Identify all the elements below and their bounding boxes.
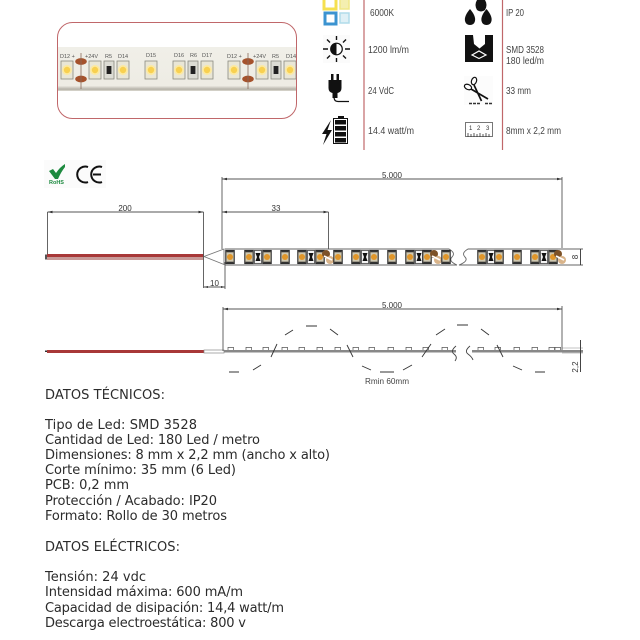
text block: technical data: Cantidad de Led: 180 Led / metro bbox=[45, 433, 260, 448]
spec: protection: IP 20 bbox=[506, 8, 524, 19]
heading: technical data: DATOS TÉCNICOS: bbox=[45, 387, 165, 403]
icon: power battery bbox=[322, 116, 348, 145]
icon: power plug bbox=[328, 74, 349, 102]
dimension: 2,2 bbox=[571, 340, 580, 373]
dimension: 5.000 side bbox=[223, 301, 562, 351]
text block: technical data: Dimensiones: 8 mm x 2,2 mm (ancho x alto) bbox=[45, 448, 330, 463]
icon: scissors bbox=[463, 76, 493, 105]
strip top view: right segment bbox=[459, 249, 583, 265]
dimension: 5.000 top: 5.000 bbox=[382, 171, 403, 180]
spec: dimensions: 8mm x 2,2 mm bbox=[506, 126, 561, 137]
strip photo band: D12 + bbox=[227, 54, 242, 60]
icon: ruler: 3 bbox=[486, 126, 490, 132]
strip photo band bbox=[58, 47, 296, 91]
strip photo band: +24V bbox=[253, 54, 266, 60]
dimension: 33 bbox=[222, 204, 328, 249]
dimension: 5.000 top bbox=[222, 171, 562, 249]
spec: LED type and density: 180 led/m bbox=[506, 56, 544, 67]
icon: brightness sun bbox=[323, 35, 350, 63]
text block: technical data: Corte mínimo: 35 mm (6 Led) bbox=[45, 463, 236, 478]
certification logos bbox=[44, 160, 106, 188]
icon: ruler bbox=[466, 122, 492, 137]
text block: electrical data: Tensión: 24 vdc bbox=[44, 570, 146, 585]
strip photo band: +24V bbox=[85, 54, 98, 60]
strip photo band: D17 bbox=[202, 53, 212, 59]
dimension: 10 bbox=[204, 262, 225, 289]
dimension: 2,2: 2,2 bbox=[571, 361, 580, 373]
icon: RoHS check: RoHS bbox=[49, 180, 64, 186]
dimension: 200 bbox=[48, 204, 204, 288]
heading: electrical data: DATOS ELÉCTRICOS: bbox=[45, 539, 180, 555]
text block: technical data: Tipo de Led: SMD 3528 bbox=[44, 418, 197, 433]
spec: luminous flux: 1200 lm/m bbox=[368, 45, 409, 56]
strip photo band: R6 bbox=[190, 53, 197, 59]
spec: minimum cut: 33 mm bbox=[506, 86, 531, 97]
text block: electrical data: Capacidad de disipación: 14,4 watt/m bbox=[45, 601, 284, 616]
icon: LED chip bbox=[465, 35, 493, 62]
spec: voltage: 24 VdC bbox=[368, 86, 394, 97]
strip top view: left segment bbox=[225, 249, 458, 265]
technical drawing: side view bbox=[45, 301, 583, 386]
strip side view bbox=[224, 346, 583, 361]
strip photo band: R5 bbox=[272, 54, 279, 60]
text block: electrical data: Descarga electroestática: 800 v bbox=[45, 616, 246, 631]
wire: red lead top view bbox=[45, 254, 204, 260]
wire: red lead side view bbox=[45, 350, 224, 353]
dimension: 33: 33 bbox=[272, 204, 281, 213]
icon: CE mark bbox=[77, 166, 102, 182]
icon: ruler: 2 bbox=[477, 126, 481, 132]
icon: water drops bbox=[465, 0, 492, 25]
spec: LED type and density: SMD 3528 bbox=[506, 45, 544, 56]
text block: technical data bbox=[44, 418, 330, 524]
dimension: 8 bbox=[571, 249, 580, 265]
strip photo band: D14 bbox=[118, 54, 128, 60]
dashed bend radius arcs bbox=[229, 325, 545, 372]
dimension: 10: 10 bbox=[210, 279, 219, 288]
dimension: 5.000 side: 5.000 bbox=[382, 301, 403, 310]
technical drawing: top view bbox=[45, 171, 583, 289]
strip photo band: D14 bbox=[286, 54, 296, 60]
dimension: 200: 200 bbox=[118, 204, 132, 213]
label: bend radius: Rmin 60mm bbox=[365, 377, 409, 386]
text block: technical data: Formato: Rollo de 30 metros bbox=[45, 509, 227, 524]
text block: technical data: PCB: 0,2 mm bbox=[45, 478, 129, 493]
icon: colour temperature bbox=[324, 0, 349, 24]
spec: power: 14.4 watt/m bbox=[368, 126, 414, 137]
dimension: 8: 8 bbox=[571, 254, 580, 259]
strip photo band: D15 bbox=[146, 53, 156, 59]
text block: electrical data bbox=[44, 570, 284, 631]
text block: electrical data: Intensidad máxima: 600 mA/m bbox=[45, 585, 243, 600]
strip photo band: R5 bbox=[105, 54, 112, 60]
strip photo band: D16 bbox=[174, 53, 184, 59]
spec: LED type and density bbox=[506, 45, 544, 67]
panel: LED strip photo bbox=[58, 22, 296, 118]
icon: ruler: 1 bbox=[469, 126, 473, 132]
strip photo band: D12 + bbox=[60, 54, 75, 60]
strip end cone bbox=[204, 249, 224, 264]
spec: colour temperature: 6000K bbox=[370, 8, 394, 19]
text block: technical data: Protección / Acabado: IP20 bbox=[45, 494, 217, 509]
